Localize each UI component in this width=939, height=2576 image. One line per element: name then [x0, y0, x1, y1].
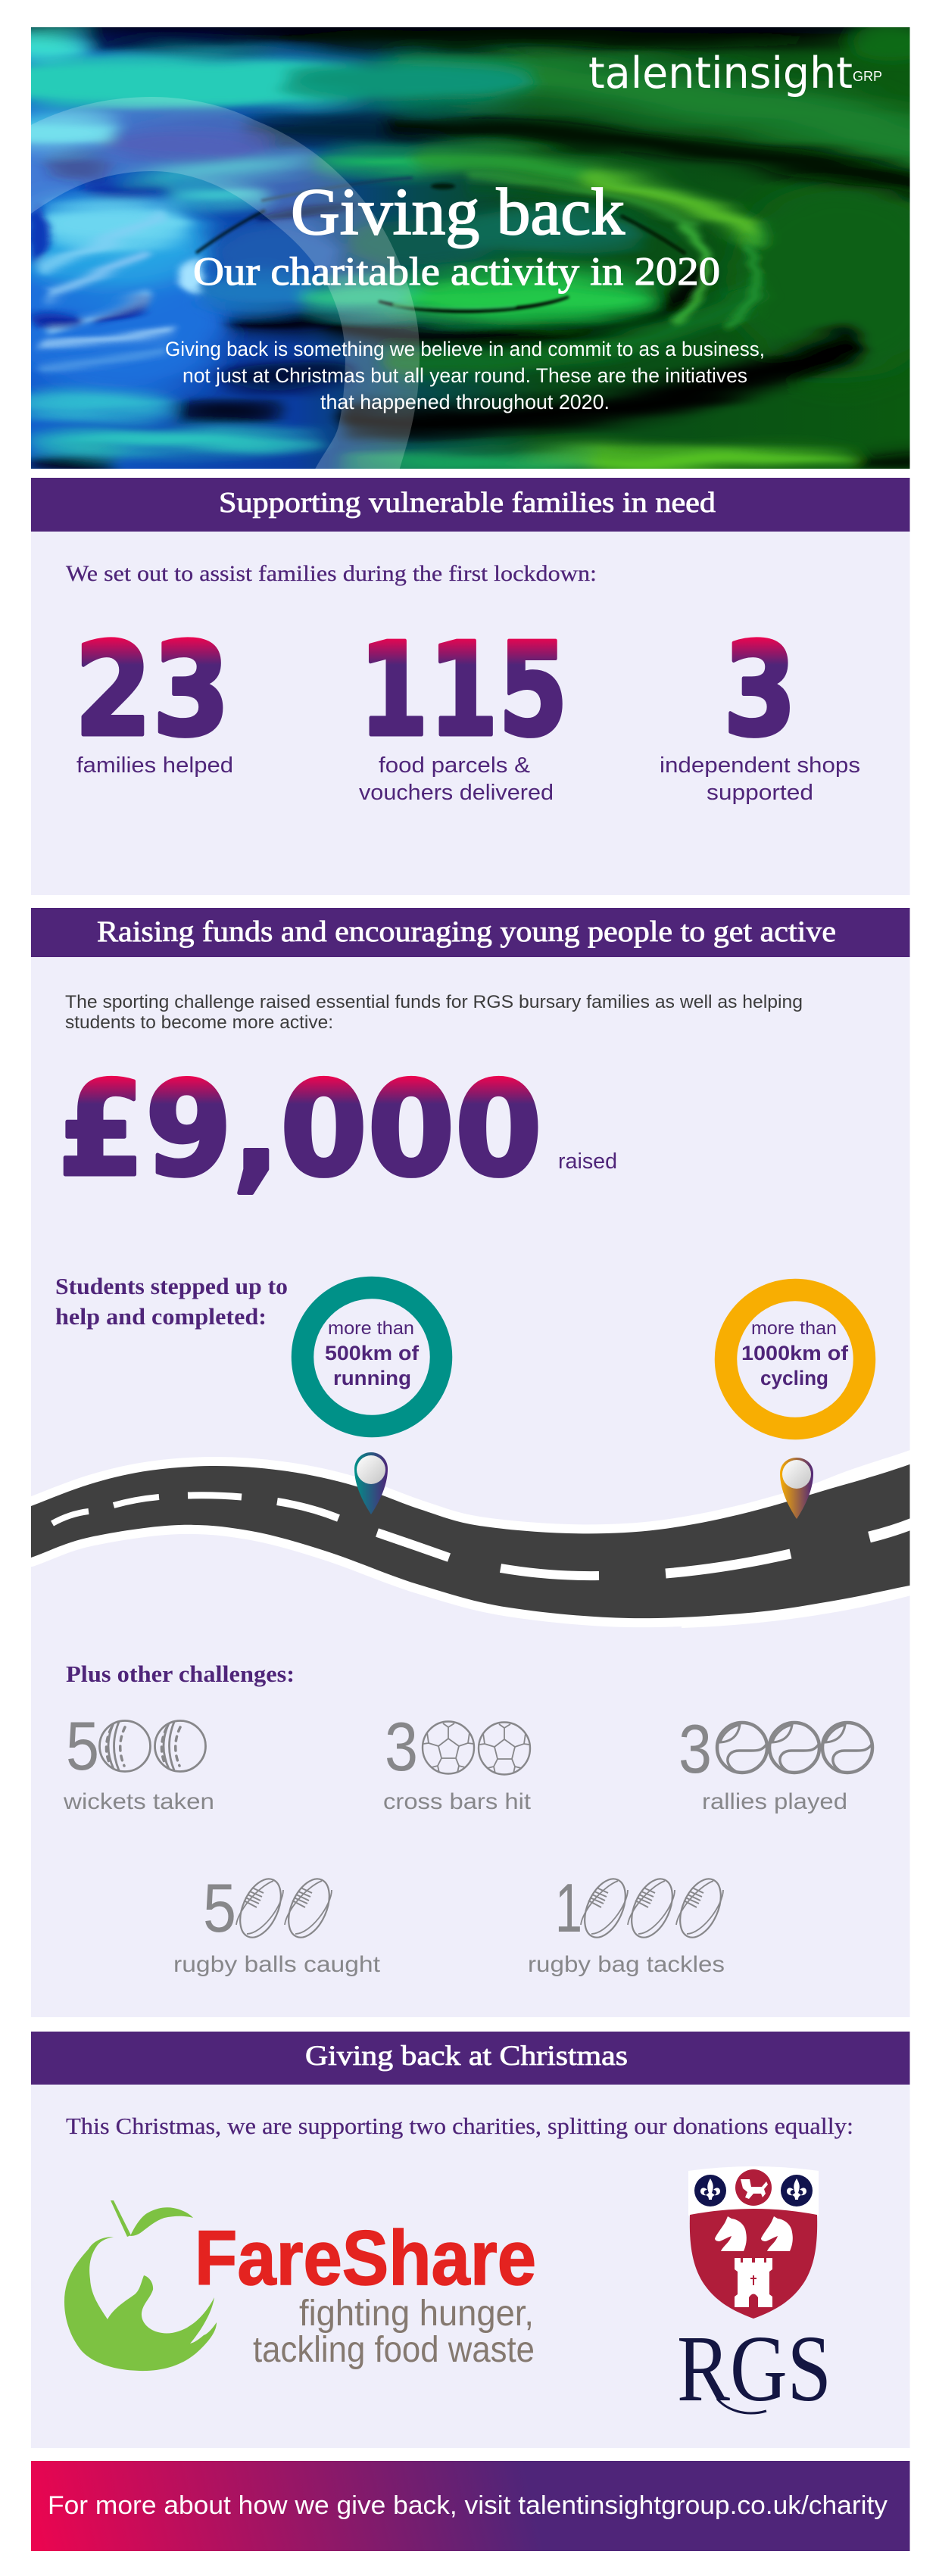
stat: 115: vouchers delivered	[359, 781, 554, 805]
crest roundels	[694, 2169, 813, 2206]
challenge: 500 wickets	[63, 1708, 214, 1814]
crest shield	[690, 2209, 817, 2319]
stat: £9,000 raised: raised	[558, 1149, 617, 1174]
ring: 1000km of cycling: more than	[751, 1318, 837, 1339]
subheading: other challenges: Plus other challenges:	[66, 1661, 295, 1687]
hero subtitle: Our charitable activity in 2020	[193, 250, 720, 294]
hero title: Giving back	[291, 176, 625, 249]
crest wordmark: RGS	[677, 2317, 831, 2422]
challenge: 3000 rallies	[679, 1711, 872, 1814]
stat: 3: independent shops	[660, 753, 860, 778]
challenge: 300 cross bars: cross bars hit	[383, 1789, 532, 1814]
stat: 3: supported	[707, 781, 813, 805]
translucent ribbon overlay	[31, 97, 420, 473]
section 1 header: Supporting vulnerable families in need	[219, 487, 716, 519]
hero intro paragraph: that happened throughout 2020.	[320, 391, 610, 413]
challenge: 1000 rugby bag tackles: rugby bag tackles	[528, 1952, 725, 1977]
challenge: 300 cross bars	[383, 1709, 532, 1814]
panel: Christmas charities	[31, 2085, 910, 2448]
drop dimple and crescent highlights	[196, 178, 685, 312]
logo: talentinsight GRP: talentinsight	[588, 48, 853, 98]
intro sentence: This Christmas, we are supporting two charities, splitting our donations equally:	[66, 2113, 853, 2139]
challenge: 300 cross bars: 3	[385, 1709, 418, 1785]
ring: 500km of running	[303, 1287, 441, 1427]
logo: talentinsight GRP: GRP	[853, 69, 882, 84]
lead text: students stepped up: Students stepped up to	[55, 1273, 288, 1299]
crest white band	[688, 2166, 819, 2216]
challenge: 1000 rugby bag tackles	[528, 1870, 729, 1977]
ring: 1000km of cycling: 1000km of	[741, 1342, 849, 1364]
icon: green apple and hand	[64, 2200, 217, 2371]
hero intro paragraph	[165, 338, 765, 413]
logo: RGS crest	[677, 2166, 831, 2422]
section 2 header	[31, 908, 910, 957]
challenge: 500 rugby balls: rugby balls caught	[173, 1952, 381, 1977]
road	[0, 1448, 939, 1628]
section 3 header: Giving back at Christmas	[305, 2041, 628, 2072]
crest knights and castle	[715, 2216, 793, 2307]
intro paragraph	[65, 992, 803, 1033]
section 1 header	[31, 478, 910, 532]
hero intro paragraph: not just at Christmas but all year round. These are the initiatives	[182, 364, 747, 387]
ring: 500km of running: running	[333, 1367, 411, 1389]
challenge: 500 wickets: 5	[66, 1708, 99, 1785]
ring: 500km of running: more than	[328, 1318, 414, 1339]
hero banner	[0, 15, 939, 474]
challenge: 3000 rallies: 3	[679, 1711, 712, 1788]
intro sentence: We set out to assist families during the first lockdown:	[66, 561, 597, 586]
section 3 header	[31, 2032, 910, 2085]
challenge: 500 wickets: wickets taken	[63, 1789, 214, 1814]
hero water photo	[0, 15, 939, 474]
stat: 115: 115	[359, 616, 568, 766]
stat: 23: 23	[74, 616, 230, 766]
challenge: 3000 rallies: rallies played	[702, 1789, 847, 1814]
lead text: students stepped up	[55, 1273, 288, 1330]
panel: raising funds	[0, 957, 939, 2017]
tagline: tackling food waste	[253, 2330, 535, 2370]
intro paragraph: The sporting challenge raised essential funds for RGS bursary families as well as helping	[65, 992, 803, 1012]
tagline: fighting hunger,	[299, 2294, 534, 2334]
challenge: 500 rugby balls	[173, 1870, 381, 1977]
intro paragraph: students to become more active:	[65, 1012, 333, 1033]
challenge: 1000 rugby bag tackles: 1	[555, 1870, 582, 1947]
stat: 23: families helped	[76, 753, 233, 778]
icon: teal map pin	[354, 1452, 388, 1514]
challenge: 500 rugby balls: 5	[203, 1870, 236, 1947]
section 2 header: Raising funds and encouraging young people to get active	[97, 915, 836, 948]
stat: £9,000 raised: £9,000	[58, 1053, 542, 1205]
tagline	[253, 2294, 535, 2370]
panel: supporting families	[31, 532, 910, 895]
logo: FareShare	[64, 2200, 536, 2371]
hero intro paragraph: Giving back is something we believe in and commit to as a business,	[165, 338, 765, 360]
ring: 500km of running: 500km of	[325, 1342, 420, 1364]
lead text: students stepped up: help and completed:	[55, 1303, 267, 1330]
ring: 1000km of cycling	[725, 1290, 865, 1428]
wordmark: FareShare	[195, 2215, 536, 2301]
stat: 3: 3	[723, 616, 797, 766]
stat: 115: food parcels &	[379, 753, 530, 778]
ring: 1000km of cycling: cycling	[760, 1367, 828, 1389]
stat: 115	[359, 616, 568, 805]
icon: orange map pin	[780, 1458, 813, 1519]
stat: 3	[660, 616, 860, 805]
footer call to action: For more about how we give back, visit talentinsightgroup.co.uk/charity	[48, 2491, 888, 2520]
footer call to action	[31, 2461, 910, 2551]
